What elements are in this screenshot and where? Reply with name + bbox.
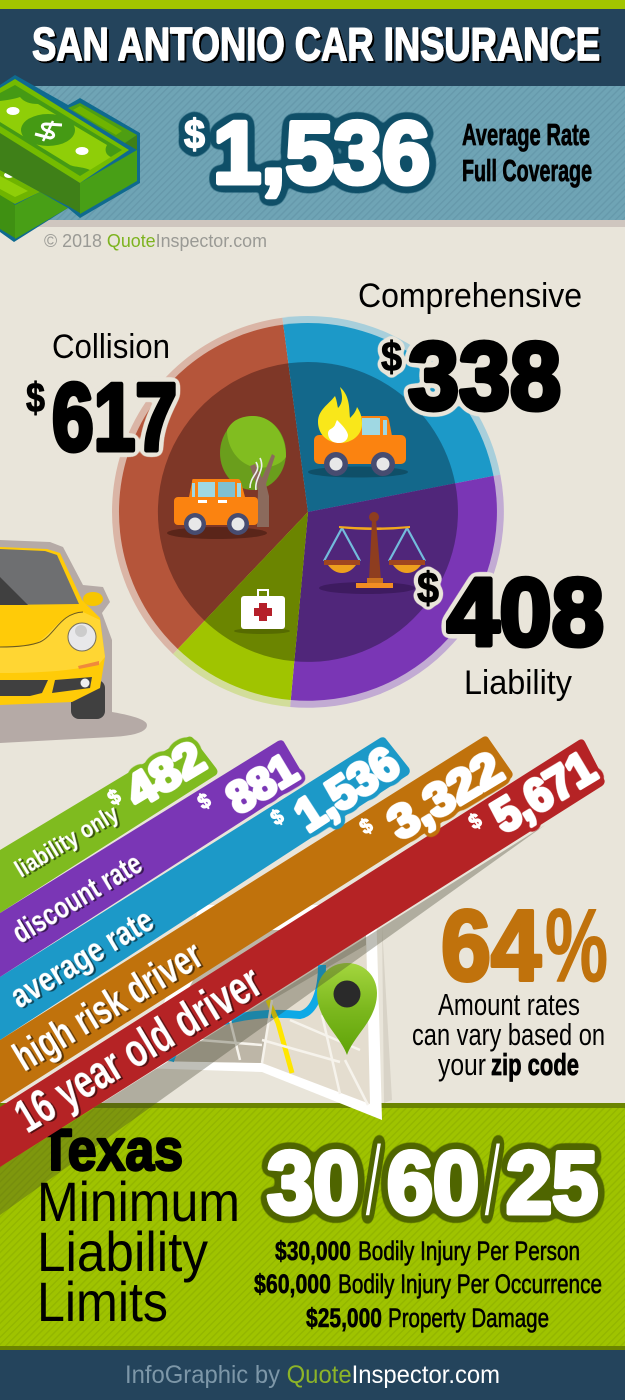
big limits number: 25 [506,1133,598,1232]
slice: collision [112,318,308,654]
icon: car crashed into tree [167,416,286,539]
band: average rate: 1,536 [285,736,408,841]
pie chart [112,316,504,708]
label: liability: $ [417,564,439,613]
label: liability: 408 [447,559,604,666]
band: 16 year old driver [0,739,605,1167]
label: comprehensive: Comprehensive [358,277,582,315]
label: comprehensive: 338 [408,323,561,430]
copyright line: © 2018 QuoteInspector.com [44,231,267,251]
icon: burning car [308,387,408,478]
band: 16 year old driver: $ [465,809,486,834]
icon: first aid kit [234,590,290,634]
limits breakdown [254,1236,602,1333]
Texas text: Minimum [37,1170,240,1233]
footer: InfoGraphic by QuoteInspector.com [125,1361,500,1389]
big limits number: 60 [387,1133,479,1232]
label: collision: Collision [52,328,170,366]
panel: average rate band [0,86,625,227]
band: discount rate: 881 [218,744,306,824]
Texas text: Texas [40,1118,183,1183]
label: collision: 617 [52,364,177,471]
band: high risk driver: high risk driver [5,931,210,1080]
stat: zip code variation: 64 [441,890,541,1002]
stat: zip code variation: Amount rates [438,987,580,1022]
stat: zip code variation [412,888,608,1082]
footer [0,1350,625,1400]
band: liability only: liability only [10,800,124,883]
big rate number: 1,536 [213,103,430,202]
red band shadow [0,825,545,1215]
band: high risk driver [0,736,513,1103]
band: discount rate: $ [194,789,215,814]
label: liability: Liability [464,664,572,702]
limits breakdown: $60,000 [254,1269,331,1299]
label: comprehensive: $ [381,333,402,380]
stat: zip code variation: your [438,1047,486,1082]
band: liability only: $ [104,785,125,810]
band: average rate: average rate [4,901,160,1016]
icon: map [140,905,392,1120]
band: 16 year old driver: 5,671 [482,741,604,843]
Texas text: Liability [37,1220,208,1283]
band: liability only [0,731,218,913]
Texas text: Limits [37,1270,168,1333]
band: discount rate [0,740,306,977]
band: average rate [0,736,410,1040]
slice: liability [290,475,504,708]
band: liability only: 482 [116,731,213,818]
stat: zip code variation: zip code [491,1047,579,1082]
label: comprehensive [358,277,582,430]
band: 16 year old driver: 16 year old driver [5,954,270,1143]
slice: medical [173,512,308,707]
label: collision [26,328,177,471]
icon: yellow car [0,540,147,743]
band: discount rate: discount rate [6,845,148,950]
label: liability [417,559,604,702]
label: collision: $ [26,374,45,421]
icon: scales of justice [319,512,425,594]
limits breakdown: Property Damage [388,1303,549,1333]
big limits number: / [365,1125,382,1237]
bands: rate comparison [0,731,605,1167]
band: high risk driver: 3,322 [378,741,511,850]
big limits number: 30 [267,1133,359,1232]
slice: comprehensive [282,316,500,512]
big rate number: $ [184,111,205,157]
icon: stack of money [0,75,140,242]
header band: title [0,0,625,86]
Texas text [37,1118,240,1333]
panel: Texas minimum limits [0,1103,625,1350]
big limits number [267,1125,598,1237]
big limits number: / [484,1125,501,1237]
limits breakdown: $25,000 [306,1303,382,1333]
rate caption [462,117,592,188]
band: high risk driver: $ [356,814,377,839]
band: average rate: $ [267,805,288,830]
limits breakdown: $30,000 [275,1236,351,1266]
icon: map pin [317,963,377,1055]
